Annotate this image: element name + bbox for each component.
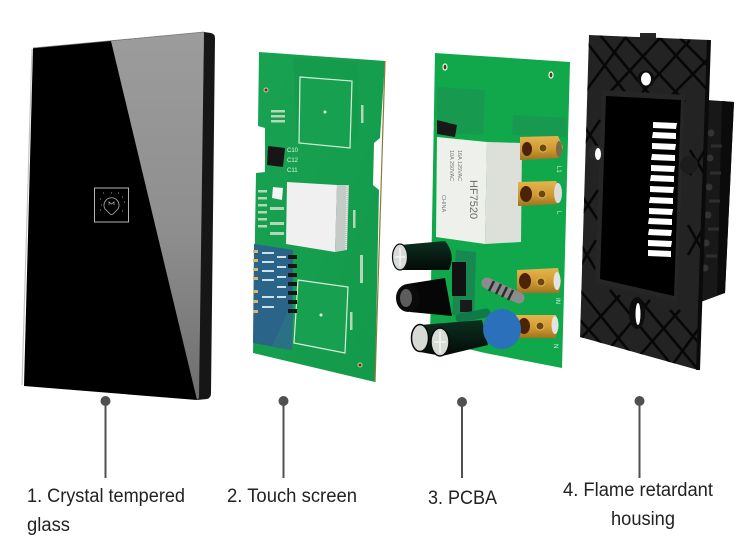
relay HF7520: HF7520	[467, 180, 479, 219]
relay HF7520: 10A 250VAC	[448, 150, 454, 181]
relay HF7520: 16A 125VAC	[456, 150, 462, 181]
panel: touch screen circuit board	[253, 52, 385, 382]
top clip tab	[640, 33, 656, 43]
chip	[267, 146, 285, 167]
resistor green	[460, 313, 486, 318]
top touch pad	[299, 77, 352, 148]
label 4: flame retardant housing: housing	[611, 509, 675, 530]
inductor	[396, 278, 452, 316]
panel: flame retardant housing	[575, 33, 734, 378]
silkscreen labels: C11	[287, 168, 298, 174]
dark copper patches	[437, 87, 567, 137]
bottom touch pad	[294, 280, 348, 353]
label 3: PCBA: 3. PCBA	[428, 488, 497, 509]
control circuit	[452, 250, 476, 318]
white shield component	[272, 182, 349, 252]
solder pads	[258, 105, 364, 330]
terminal labels: L	[555, 211, 561, 215]
label 1: crystal tempered glass: 1. Crystal tempered	[27, 486, 185, 507]
pointer 3	[457, 397, 467, 478]
label 4: flame retardant housing: 4. Flame retardant	[563, 480, 714, 501]
resistor striped	[487, 281, 519, 300]
rear housing box	[698, 100, 734, 303]
white vent slots	[648, 122, 677, 257]
silkscreen labels	[287, 148, 299, 174]
terminal labels: IN	[554, 298, 560, 304]
inner opening	[595, 90, 685, 302]
silkscreen labels: C10	[287, 148, 299, 154]
blue disc capacitor	[483, 309, 521, 349]
screw holes	[588, 70, 698, 329]
terminal labels	[552, 166, 561, 348]
terminal labels: L1	[555, 166, 561, 173]
small chip	[437, 120, 457, 137]
capacitors bottom	[412, 320, 488, 356]
pointer 4	[634, 396, 644, 478]
mounting holes	[264, 88, 362, 367]
front frame with lattice	[575, 35, 712, 378]
label 1: crystal tempered glass: glass	[27, 515, 70, 536]
relay HF7520	[436, 137, 522, 244]
pointer 2	[278, 396, 288, 478]
pointer 1	[100, 396, 110, 478]
icon: bulb touch button	[94, 188, 128, 222]
relay HF7520: CHINA	[440, 195, 446, 212]
panel: crystal tempered glass	[22, 32, 215, 400]
screw terminals	[516, 136, 563, 338]
panel: PCBA main board	[392, 53, 570, 368]
capacitor top	[392, 241, 452, 270]
silkscreen labels: C12	[287, 158, 299, 164]
mounting holes	[443, 64, 553, 78]
label 2: touch screen: 2. Touch screen	[227, 486, 357, 507]
blue flexible connector	[253, 244, 297, 350]
terminal labels: N	[552, 344, 558, 348]
